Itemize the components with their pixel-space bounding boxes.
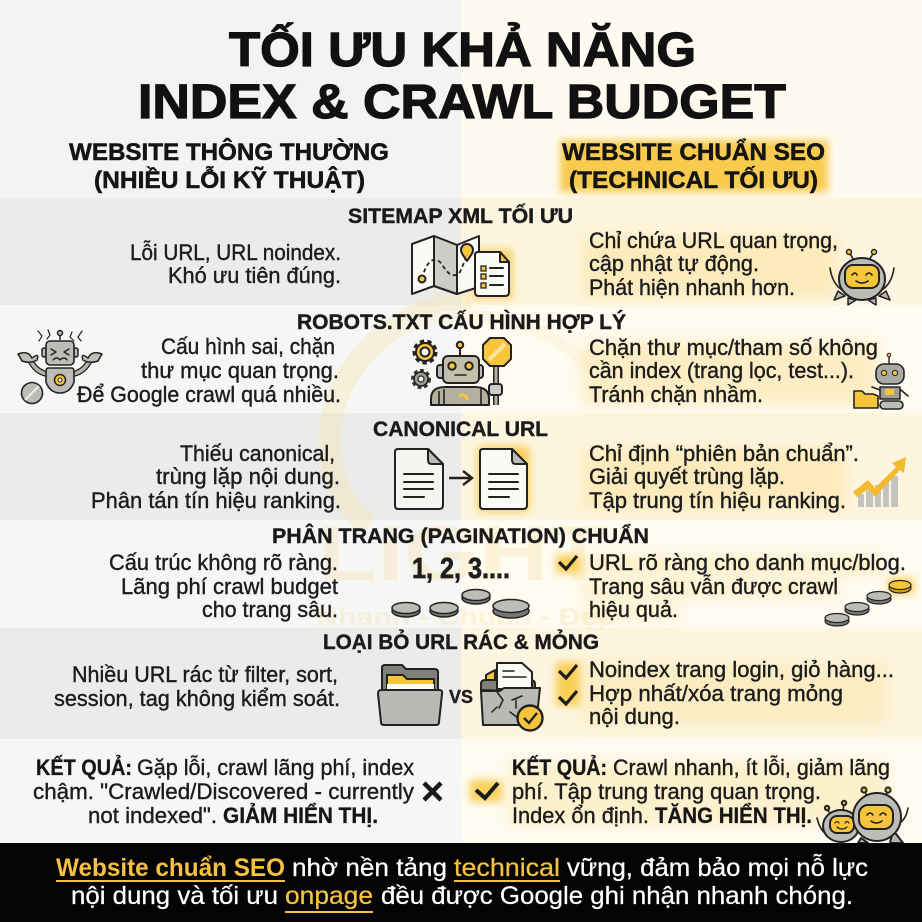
right column heading with glow: (TECHNICAL TỐI ƯU) bbox=[569, 166, 818, 194]
footer line 2: nội dung và tối ưu bbox=[71, 882, 278, 910]
icon: cross bbox=[424, 783, 441, 800]
text: sitemap problem: Khó ưu tiên đúng. bbox=[168, 263, 341, 288]
result: left: KẾT QUẢ: bbox=[36, 755, 132, 780]
text: robots solution bbox=[589, 335, 878, 407]
heading: sitemap: SITEMAP XML TỐI ƯU bbox=[348, 204, 573, 228]
text: canonical problem: trùng lặp nội dung. bbox=[156, 464, 340, 489]
text: pagination solution bbox=[589, 550, 906, 622]
text: robots solution: Tránh chặn nhầm. bbox=[589, 382, 763, 407]
footer line 1 bbox=[56, 853, 868, 882]
heading: pagination: PHÂN TRANG (PAGINATION) CHUẨN bbox=[272, 524, 649, 548]
text: junk url solution bbox=[589, 657, 894, 729]
icon: duplicate to canonical document bbox=[395, 446, 530, 512]
text: robots problem: thư mục quan trọng. bbox=[141, 358, 339, 383]
footer line 2 bbox=[71, 882, 853, 913]
text: junk url problem bbox=[54, 662, 340, 711]
icon: tidy folder bbox=[378, 665, 442, 725]
result: left: not indexed". bbox=[88, 803, 217, 828]
row: thin url removal bbox=[54, 630, 894, 730]
text: pagination problem bbox=[109, 550, 339, 622]
text: sitemap solution: cập nhật tự động. bbox=[589, 251, 759, 276]
footer line 1: vững, đảm bảo mọi nỗ lực bbox=[567, 853, 868, 882]
footer line 1: technical bbox=[454, 854, 560, 882]
text: canonical solution: Chỉ định “phiên bản chuẩn”. bbox=[589, 441, 859, 466]
right column heading with glow: WEBSITE CHUẨN SEO bbox=[562, 138, 825, 166]
icon: confused robot bbox=[18, 330, 102, 404]
text: junk url solution: Hợp nhất/xóa trang mỏng bbox=[589, 681, 843, 706]
footer banner bbox=[0, 843, 922, 922]
watermark logo bbox=[316, 300, 616, 631]
result: right: Crawl nhanh, ít lỗi, giảm lãng bbox=[613, 755, 890, 780]
heading: junk urls: LOẠI BỎ URL RÁC & MỎNG bbox=[323, 630, 599, 654]
icons: two checks bbox=[556, 662, 580, 706]
text: sitemap solution: Phát hiện nhanh hơn. bbox=[589, 275, 795, 300]
row: canonical bbox=[91, 418, 906, 513]
text: canonical solution bbox=[589, 441, 859, 513]
icon: big check bbox=[470, 780, 502, 802]
soft yellow glow behind right column bbox=[508, 235, 888, 825]
watermark logo: Nhanh - Chuẩn - Đẹp bbox=[316, 604, 616, 631]
left column heading bbox=[69, 138, 389, 194]
footer line 1: Website chuẩn SEO bbox=[56, 854, 285, 882]
result: right: phí. Tập trung trang quan trọng. bbox=[512, 779, 821, 804]
text: robots solution: Chặn thư mục/tham số không bbox=[589, 335, 878, 360]
heading: robots.txt: ROBOTS.TXT CẤU HÌNH HỢP LÝ bbox=[297, 310, 626, 334]
icon: robot with folder bbox=[854, 353, 908, 409]
text: robots problem bbox=[77, 334, 341, 407]
row: pagination bbox=[109, 524, 914, 626]
left column heading: (NHIỀU LỖI KỸ THUẬT) bbox=[94, 165, 365, 194]
text: canonical solution: Tập trung tín hiệu ranking. bbox=[589, 488, 846, 513]
icon: map and document bbox=[412, 236, 513, 299]
heading: canonical: CANONICAL URL bbox=[373, 418, 548, 441]
text: pagination problem: Cấu trúc không rõ ràng. bbox=[109, 550, 338, 575]
right column heading with glow bbox=[560, 138, 828, 194]
text: pagination problem: Lãng phí crawl budget bbox=[121, 574, 339, 599]
icon: messy folder with check bbox=[481, 663, 542, 730]
text: junk url solution: Noindex trang login, giỏ hàng... bbox=[589, 657, 894, 682]
text: sitemap solution: Chỉ chứa URL quan trọng, bbox=[589, 228, 838, 253]
text: pagination solution: hiệu quả. bbox=[589, 597, 678, 622]
result: left bbox=[33, 755, 415, 828]
text: sitemap solution bbox=[589, 228, 838, 300]
text: canonical problem bbox=[91, 441, 341, 513]
result: right bbox=[512, 755, 890, 828]
icon: rising coins bbox=[825, 578, 914, 626]
result: right: KẾT QUẢ: bbox=[512, 755, 607, 780]
result: left: chậm. "Crawled/Discovered - currently bbox=[33, 779, 415, 804]
title: INDEX & CRAWL BUDGET bbox=[138, 76, 786, 129]
text: junk url solution: nội dung. bbox=[589, 704, 680, 729]
icon: check bbox=[556, 555, 580, 573]
result: right: TĂNG HIỂN THỊ. bbox=[655, 803, 812, 828]
icon: grey coins bbox=[392, 590, 529, 618]
row: robots.txt bbox=[18, 310, 908, 409]
text: junk url problem: session, tag không kiểm soát. bbox=[54, 686, 340, 711]
text: canonical problem: Phân tán tín hiệu ranking. bbox=[91, 488, 341, 513]
text: canonical problem: Thiếu canonical, bbox=[180, 441, 335, 466]
row: sitemap bbox=[130, 204, 894, 305]
icon: rising chart bbox=[853, 457, 906, 507]
footer line 2: đều được Google ghi nhận nhanh chóng. bbox=[381, 882, 853, 910]
text: sitemap problem bbox=[130, 240, 341, 288]
text: robots solution: cần index (trang lọc, test...). bbox=[589, 358, 854, 383]
title bbox=[138, 22, 786, 129]
result: left: Gặp lỗi, crawl lãng phí, index bbox=[137, 755, 415, 780]
result: left: GIẢM HIỂN THỊ. bbox=[223, 803, 378, 828]
icon: robot with stop sign and gears bbox=[413, 338, 511, 405]
left column heading: WEBSITE THÔNG THƯỜNG bbox=[69, 138, 389, 166]
text: junk url problem: Nhiều URL rác từ filter, sort, bbox=[72, 662, 338, 687]
text: canonical solution: Giải quyết trùng lặp. bbox=[589, 464, 785, 489]
text: sitemap problem: Lỗi URL, URL noindex. bbox=[130, 240, 341, 265]
text: pagination solution: Trang sâu vẫn được crawl bbox=[589, 574, 838, 599]
text: pagination solution: URL rõ ràng cho danh mục/blog. bbox=[589, 550, 906, 575]
text: robots problem: Để Google crawl quá nhiều. bbox=[77, 382, 341, 407]
title: TỐI ƯU KHẢ NĂNG bbox=[229, 22, 696, 77]
footer line 1: nhờ nền tảng bbox=[292, 854, 447, 882]
watermark logo: LIGHT bbox=[318, 509, 608, 597]
icon: happy bug robot bbox=[830, 250, 894, 305]
text: robots problem: Cấu hình sai, chặn bbox=[161, 334, 335, 359]
footer line 2: onpage bbox=[285, 882, 373, 910]
number sequence: 1, 2, 3.... bbox=[412, 553, 510, 585]
label: versus: VS bbox=[449, 687, 473, 707]
result: right: Index ổn định. bbox=[512, 803, 649, 828]
icon: two happy robots bbox=[817, 787, 908, 843]
text: pagination problem: cho trang sâu. bbox=[202, 597, 338, 622]
